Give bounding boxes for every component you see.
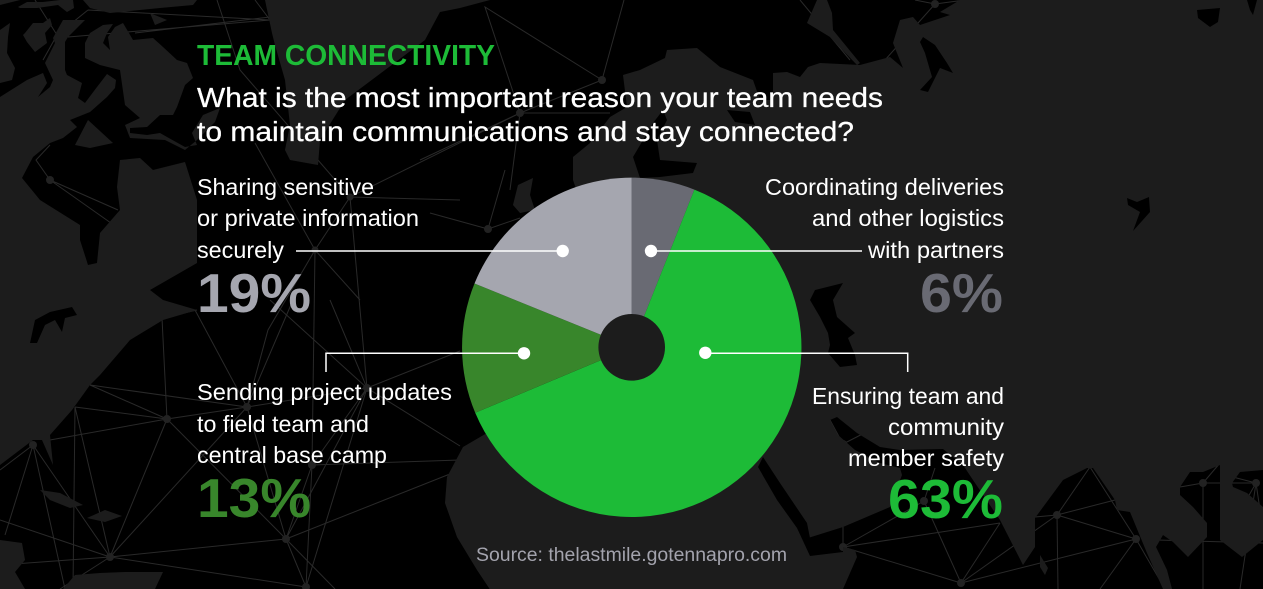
- callout: sensitive information 19%: securely: [197, 237, 284, 263]
- callout: project updates 13%: to field team and: [197, 411, 369, 437]
- heading block: [197, 40, 883, 147]
- callout: logistics 6%: Coordinating deliveries: [765, 174, 1004, 200]
- slice: project updates 13%: [462, 284, 632, 413]
- callout: project updates 13%: [197, 379, 452, 529]
- question: to maintain communications and stay connected?: [197, 116, 854, 147]
- slice: logistics 6%: [632, 178, 694, 347]
- pie chart: [462, 178, 801, 517]
- title: TEAM CONNECTIVITY: [197, 40, 495, 72]
- callout: sensitive information 19%: [197, 174, 419, 324]
- callout: team safety 63%: member safety: [848, 445, 1005, 471]
- callout: project updates 13%: 13%: [197, 467, 311, 529]
- callout: team safety 63%: [812, 383, 1005, 530]
- callout: logistics 6%: 6%: [920, 262, 1003, 324]
- callout: project updates 13%: Sending project updates: [197, 379, 452, 405]
- callout: sensitive information 19%: or private information: [197, 205, 419, 231]
- callout: team safety 63%: 63%: [888, 468, 1003, 530]
- callout: sensitive information 19%: Sharing sensitive: [197, 174, 374, 200]
- slice: sensitive information 19%: [474, 178, 632, 347]
- leader lines and dots: [296, 245, 908, 372]
- callout: project updates 13%: central base camp: [197, 442, 387, 468]
- callout: team safety 63%: Ensuring team and: [812, 383, 1004, 409]
- source note: Source: thelastmile.gotennapro.com: [476, 545, 787, 566]
- callout: logistics 6%: and other logistics: [812, 205, 1004, 231]
- question: [197, 82, 883, 147]
- question: What is the most important reason your team needs: [197, 82, 883, 113]
- callout: logistics 6%: [765, 174, 1004, 324]
- pie centre hole: [598, 314, 665, 381]
- callout: sensitive information 19%: 19%: [197, 262, 311, 324]
- slice: safety 63%: [475, 190, 801, 517]
- callout: team safety 63%: community: [888, 414, 1005, 440]
- callout: logistics 6%: with partners: [867, 237, 1004, 263]
